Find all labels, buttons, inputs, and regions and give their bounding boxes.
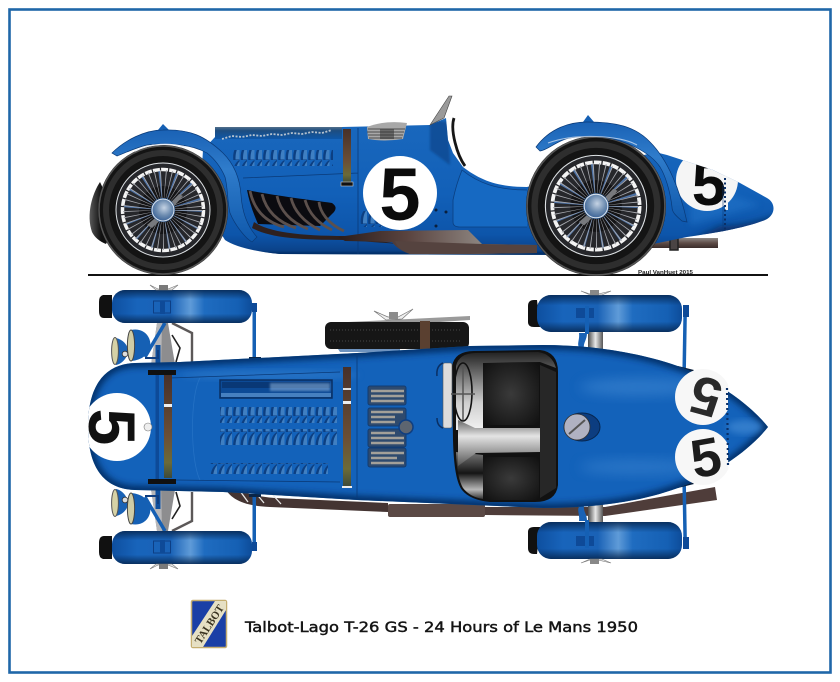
cockpit xyxy=(437,350,558,502)
fuel filler cap xyxy=(564,413,600,441)
tail number roundel: 5 xyxy=(692,150,726,219)
nose rivet line xyxy=(727,388,728,465)
front axle and clamps xyxy=(148,370,176,484)
exhaust manifold xyxy=(247,190,537,254)
race number roundel: 5 xyxy=(379,153,421,236)
hood louvres row 3 xyxy=(210,463,328,474)
rear fender xyxy=(536,115,687,222)
cowl vents xyxy=(368,386,413,467)
rear wheel side view xyxy=(526,136,666,276)
signature: Paul VanHuet 2015 xyxy=(638,270,694,276)
front strap xyxy=(164,375,172,478)
top view of the car xyxy=(75,285,780,569)
side view of the car xyxy=(88,96,780,276)
rear race number roundels: 5 xyxy=(686,426,726,490)
caption title: Talbot-Lago T-26 GS - 24 Hours of Le Mans 1950 xyxy=(244,620,638,636)
rear exhaust tail xyxy=(650,229,718,250)
spare wheel xyxy=(325,309,470,352)
race number roundel xyxy=(363,153,437,236)
front race number roundel: 5 xyxy=(75,409,149,445)
front wheels, lamps and axle lower xyxy=(99,473,261,569)
windscreen xyxy=(430,96,452,125)
front wheels, lamps and axle upper xyxy=(99,285,261,381)
tail number roundel xyxy=(676,160,738,232)
Talbot logo: TALBOT xyxy=(193,602,227,646)
rear strap xyxy=(342,367,352,488)
rear wheel lower xyxy=(528,482,694,564)
hood strap xyxy=(341,129,353,186)
filler cap ribs xyxy=(367,122,407,140)
rear body louvres xyxy=(360,211,382,227)
top exhaust system xyxy=(223,484,717,517)
front race number roundel xyxy=(88,393,152,461)
hood panel xyxy=(220,380,332,398)
ground line xyxy=(88,274,768,276)
hood side louvres xyxy=(232,150,333,166)
rear race number roundels: 5 xyxy=(684,363,728,429)
top body xyxy=(88,345,780,508)
hood louvres row 2 xyxy=(220,429,338,445)
hood louvres row 1 xyxy=(220,407,338,423)
front fender xyxy=(112,124,257,242)
side body xyxy=(200,118,780,262)
front wheel side view xyxy=(98,145,228,275)
steering wheel xyxy=(453,118,465,166)
rear wheel upper xyxy=(528,290,694,372)
hood top panel xyxy=(215,127,342,139)
front apron xyxy=(90,182,118,244)
rivets xyxy=(436,210,446,226)
rear race number roundels xyxy=(675,370,728,484)
